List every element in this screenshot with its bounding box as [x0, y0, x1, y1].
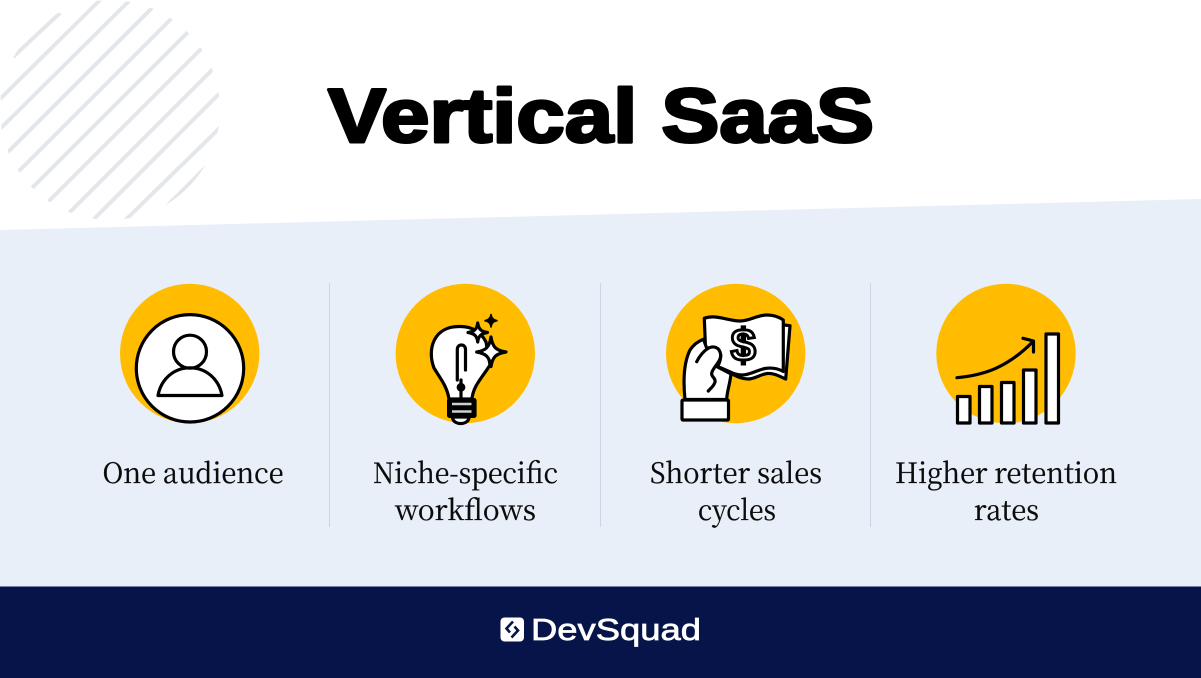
label: niche-specific workflows [373, 452, 558, 529]
label: higher retention rates: rates [974, 489, 1039, 529]
icon: hand holding money: $ [731, 320, 756, 370]
logo: DevSquad [500, 612, 701, 647]
label: shorter sales cycles [650, 452, 822, 529]
label: one audience: One audience [102, 452, 284, 492]
decorative striped circle [0, 0, 219, 219]
panel: shorter sales cycles [650, 284, 822, 529]
label: shorter sales cycles: Shorter sales [650, 452, 822, 492]
panel: one audience [102, 284, 284, 492]
logo wordmark: DevSquad [531, 612, 701, 647]
title: Vertical SaaS [328, 74, 874, 159]
logo mark [500, 618, 524, 642]
icon: light bulb [396, 284, 535, 424]
label: shorter sales cycles: cycles [698, 489, 776, 529]
divider 2 [600, 283, 601, 527]
panel: higher retention rates [895, 284, 1117, 529]
panel: niche-specific workflows [373, 284, 558, 529]
label: higher retention rates: Higher retention [895, 452, 1117, 492]
label: niche-specific workflows: Niche-specific [373, 452, 558, 492]
label: higher retention rates [895, 452, 1117, 529]
icon: growth chart [936, 284, 1076, 423]
divider 1 [329, 283, 330, 527]
divider 3 [870, 283, 871, 527]
icon: person [120, 284, 259, 423]
icon: hand holding money [666, 284, 805, 423]
light blue band [0, 199, 1201, 587]
footer bar [0, 586, 1201, 678]
label: niche-specific workflows: workflows [394, 489, 536, 529]
